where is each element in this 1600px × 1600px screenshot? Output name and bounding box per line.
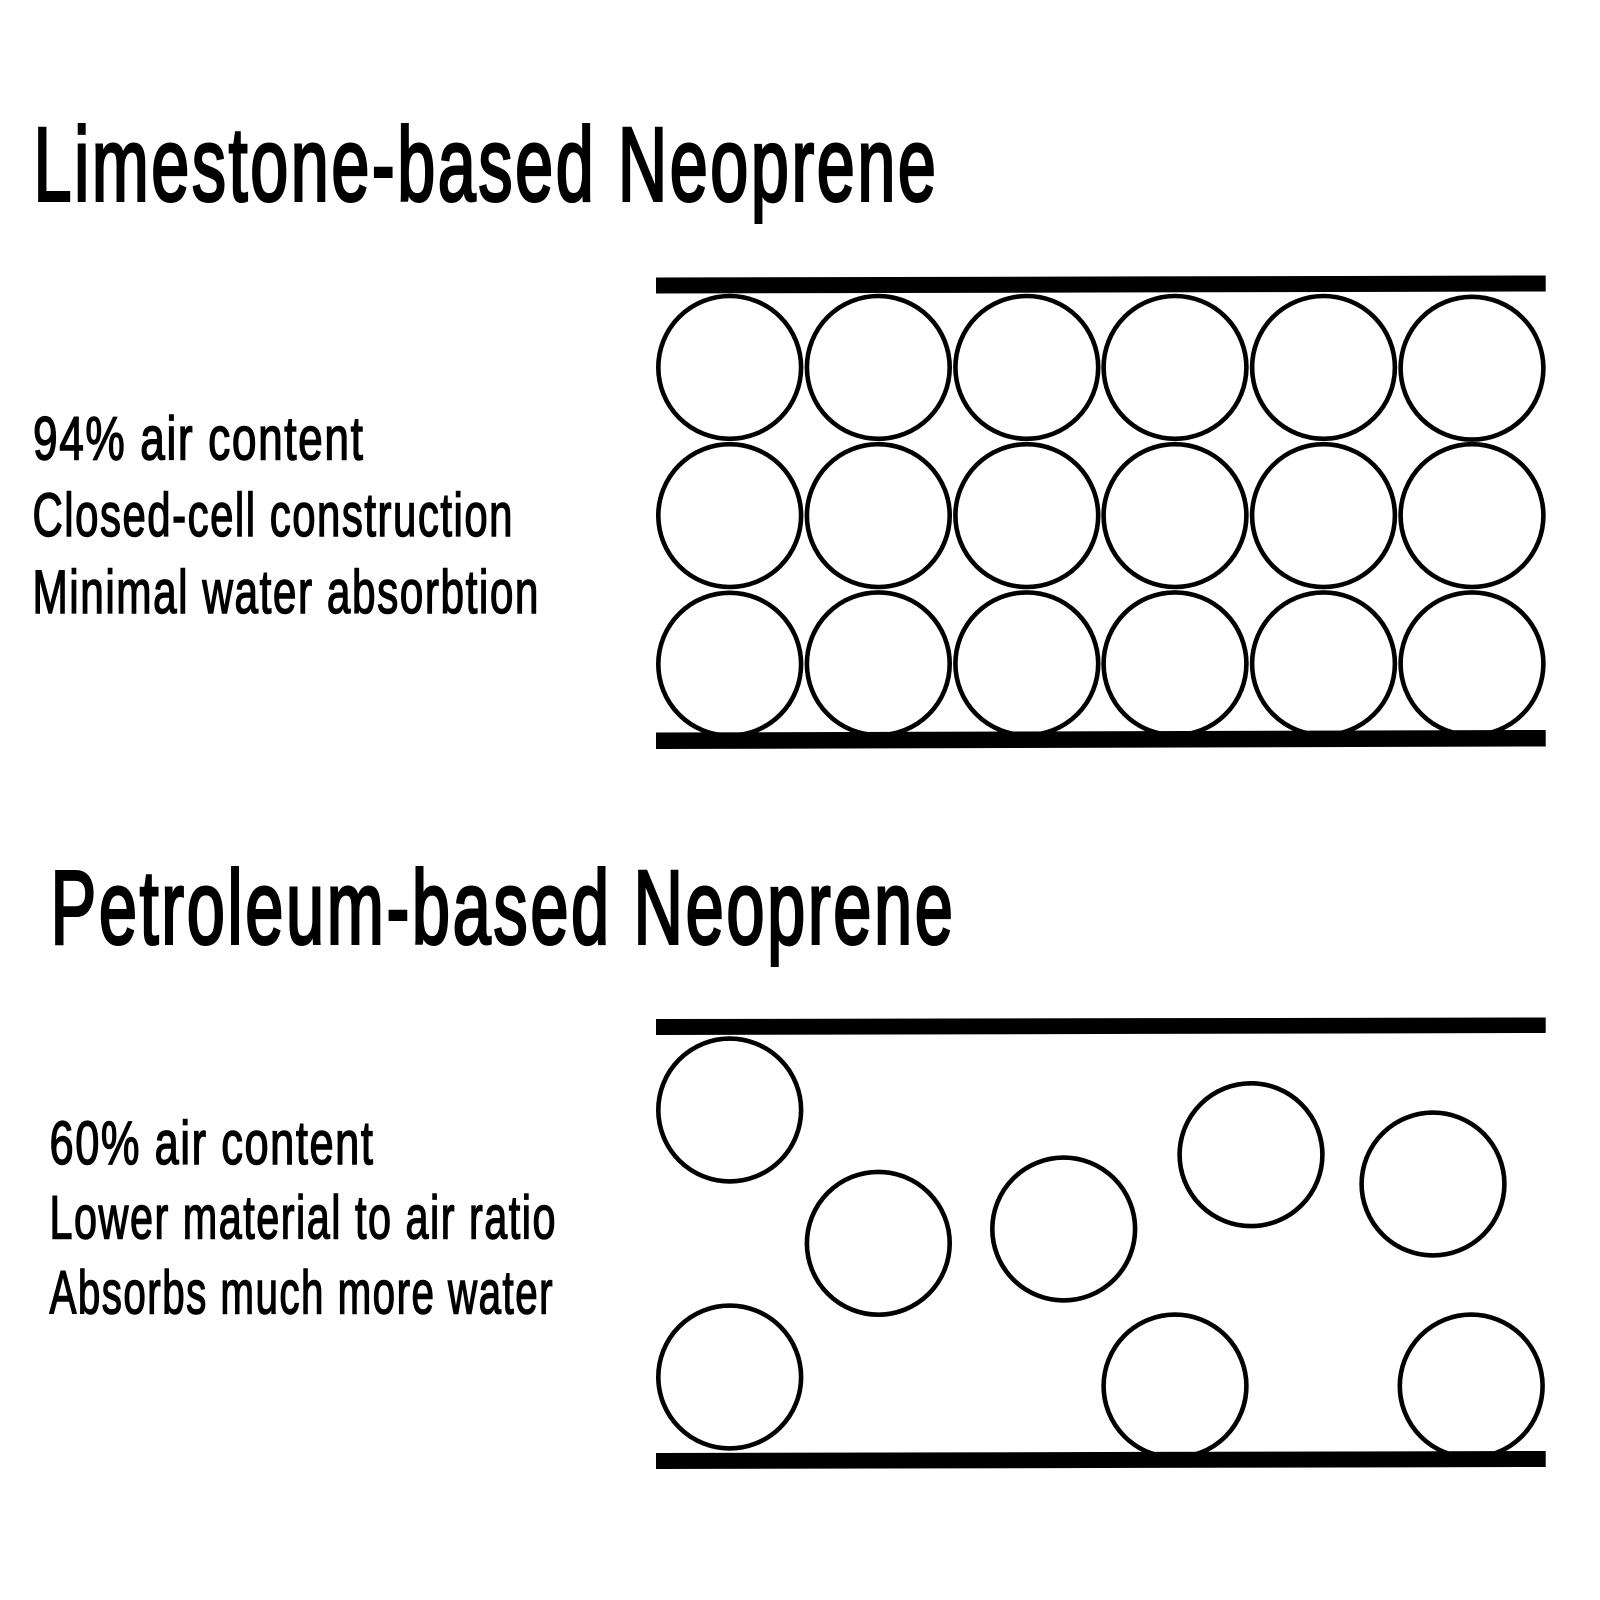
cells: scattered — [658, 1039, 1543, 1457]
diagram: dense closed-cell structure — [656, 276, 1546, 749]
text block: petroleum properties — [50, 1109, 557, 1326]
panel: limestone-based neoprene — [32, 107, 1546, 749]
cells: row 2 — [658, 444, 1543, 587]
bottom bar — [656, 1451, 1546, 1469]
text block: petroleum properties: 60% air content — [50, 1109, 374, 1177]
text block: limestone properties: Closed-cell construction — [32, 481, 514, 549]
cells: row 3 — [658, 592, 1543, 736]
heading: petroleum: Petroleum-based Neoprene — [50, 849, 955, 966]
diagram: sparse open structure — [656, 1018, 1546, 1469]
text block: limestone properties — [32, 404, 540, 626]
panel: petroleum-based neoprene — [50, 849, 1546, 1469]
text block: limestone properties: Minimal water absorbtion — [32, 558, 540, 626]
text block: petroleum properties: Absorbs much more water — [50, 1258, 554, 1326]
text block: petroleum properties: Lower material to air ratio — [50, 1183, 557, 1251]
top bar — [656, 276, 1546, 294]
cells: row 1 — [658, 296, 1543, 440]
text block: limestone properties: 94% air content — [33, 404, 364, 472]
heading: limestone: Limestone-based Neoprene — [34, 107, 938, 224]
top bar — [656, 1018, 1546, 1035]
bottom bar — [656, 730, 1546, 749]
